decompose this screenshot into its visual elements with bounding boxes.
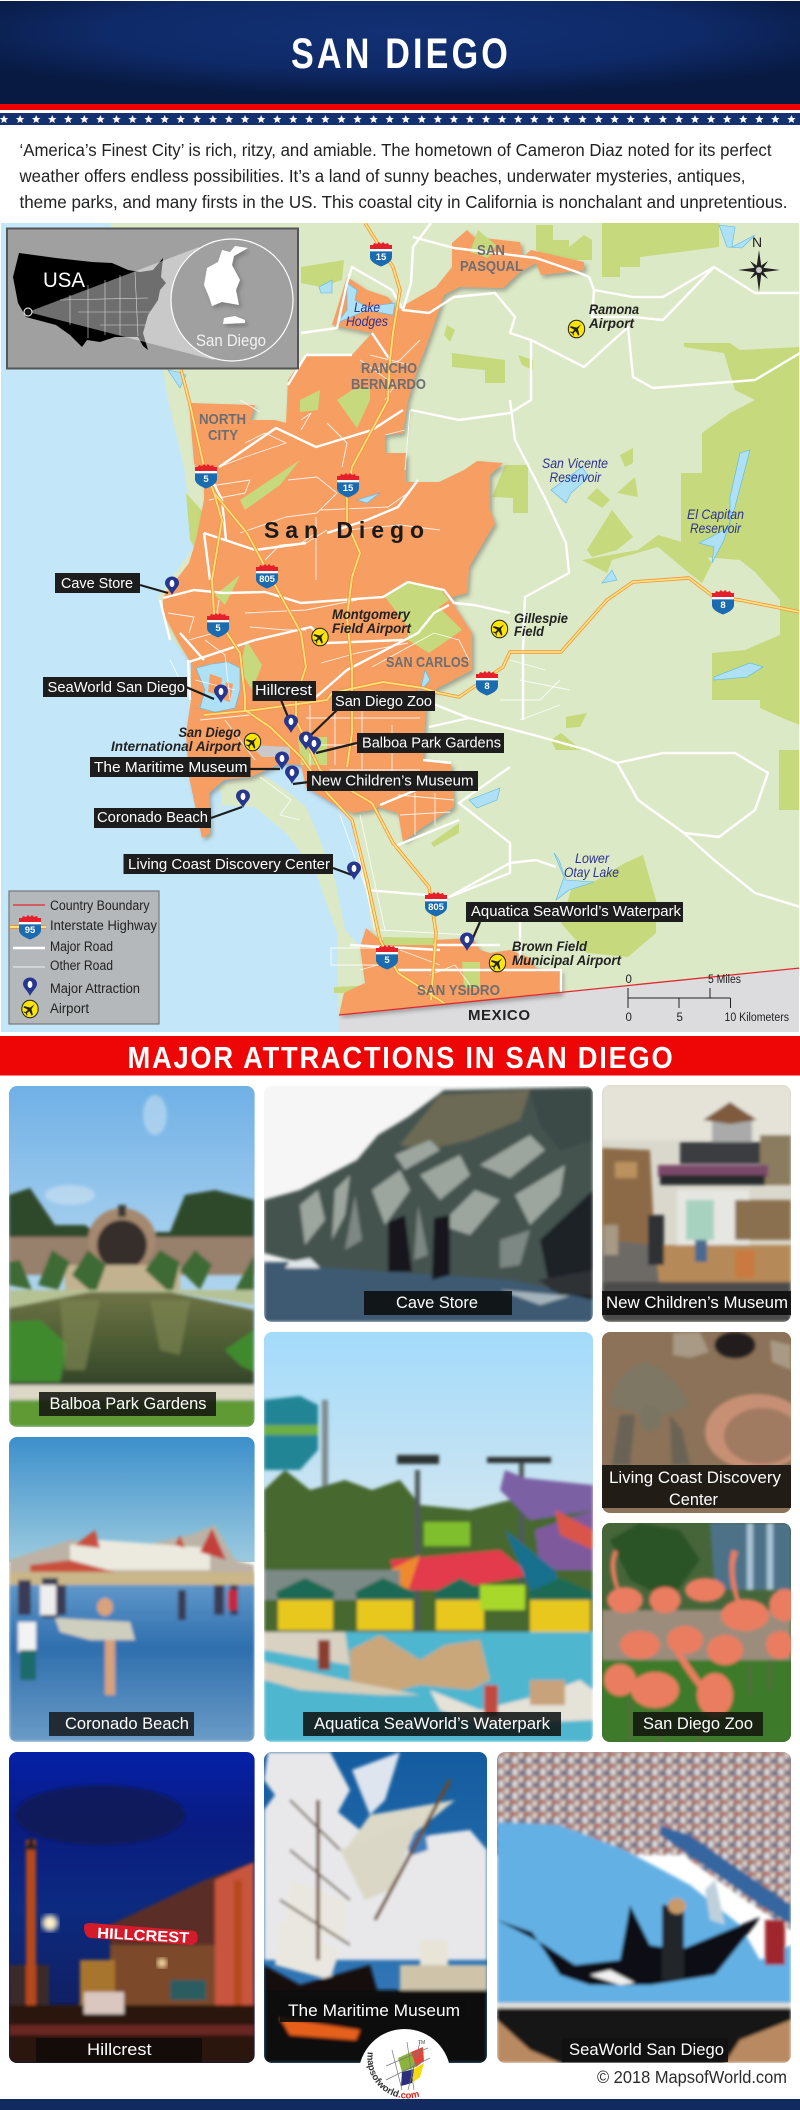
highway shields: 8 [720, 600, 726, 611]
caption: Living Coast Discovery Center [602, 1465, 791, 1509]
copyright: © 2018 MapsofWorld.com [597, 2067, 787, 2087]
region labels: SAN YSIDRO [417, 982, 500, 999]
country boundary [339, 968, 800, 1015]
highway shields: 805 [428, 902, 445, 913]
highway shields: 805 [259, 574, 276, 585]
lake labels: Hodges [346, 313, 388, 329]
airports [111, 301, 639, 972]
callout: Aquatica SeaWorld's Waterpark [460, 902, 683, 951]
lake labels: Reservoir [550, 469, 602, 485]
highway shields: 5 [215, 623, 221, 634]
caption: SeaWorld San Diego: SeaWorld San Diego [569, 2040, 724, 2059]
photo: The Maritime Museum [264, 1752, 487, 2063]
lake labels [346, 299, 744, 880]
callout: SeaWorld San Diego [43, 677, 228, 703]
airports: Gillespie [514, 610, 568, 626]
airports: San Diego [178, 724, 241, 740]
photo: Aquatica SeaWorld's Waterpark [264, 1332, 593, 1742]
lake labels: San Vicente [542, 455, 608, 471]
sign: Hillcrest: HILLCREST [97, 1925, 190, 1947]
interstate highways [181, 223, 800, 1003]
mission bay islands [208, 674, 233, 702]
logo: MapsofWorld [360, 2029, 449, 2098]
country label: Mexico: MEXICO [468, 1007, 530, 1024]
parks inside city [215, 230, 496, 988]
callout: New Children's Museum [285, 766, 478, 791]
legend [9, 891, 159, 1024]
legend: Country Boundary [50, 898, 150, 913]
callout: Cave Store: Cave Store [61, 576, 133, 592]
scale bar: 0 [626, 974, 632, 986]
airports: Ramona [589, 301, 639, 317]
highway shields: 15 [376, 252, 387, 263]
callout: SeaWorld San Diego: SeaWorld San Diego [48, 680, 185, 696]
region labels: BERNARDO [351, 376, 426, 393]
scale bar: 5 Miles [708, 974, 741, 986]
intro paragraph: weather offers endless possibilities. It’s a land of sunny beaches, underwater mysteries, antiques, [19, 166, 746, 186]
callout: The Maritime Museum [90, 752, 289, 777]
logo: MapsofWorld: TM [418, 2040, 425, 2046]
region labels: SAN CARLOS [386, 654, 469, 671]
caption: Cave Store: Cave Store [396, 1293, 478, 1312]
highway shields: 5 [203, 474, 209, 485]
compass: N [752, 234, 762, 250]
lake labels: Lower [575, 850, 610, 866]
caption: Coronado Beach: Coronado Beach [65, 1714, 189, 1733]
heading: major attractions [0, 1036, 800, 1076]
caption: Coronado Beach [49, 1712, 194, 1736]
airports: Brown Field [512, 938, 587, 954]
airports: International Airport [111, 738, 242, 754]
intro paragraph: theme parks, and many firsts in the US. This coastal city in California is nonchalant and unpretentious. [20, 192, 788, 212]
photo: Hillcrest [9, 1752, 255, 2063]
airports: Municipal Airport [512, 952, 622, 968]
callout: The Maritime Museum: The Maritime Museum [94, 760, 248, 776]
photo: San Diego Zoo [602, 1523, 800, 1742]
photo: Living Coast Discovery Center [602, 1332, 800, 1513]
other roads [168, 340, 570, 985]
zoom circle [171, 239, 293, 361]
airport runway [256, 746, 290, 757]
callout: Hillcrest [252, 681, 316, 733]
airports: Field [514, 623, 544, 639]
city of san diego area [163, 230, 584, 842]
highway shields: 8 [484, 681, 490, 692]
highway shields: 5 [384, 955, 390, 966]
caption: Balboa Park Gardens: Balboa Park Gardens [50, 1394, 206, 1413]
state lines [60, 272, 152, 338]
zoom wedge [28, 247, 214, 360]
attraction callouts and pins [43, 573, 683, 951]
photo: Balboa Park Gardens [9, 1086, 255, 1427]
lake labels: Lake [354, 299, 380, 315]
USA label: USA [43, 269, 85, 292]
caption: Cave Store [364, 1291, 512, 1315]
callout: Living Coast Discovery Center [124, 854, 361, 880]
lakes and reservoirs [168, 225, 763, 900]
scale bar [626, 974, 789, 1024]
callout: Hillcrest: Hillcrest [255, 683, 312, 699]
legend: Other Road [50, 958, 113, 973]
locator dot [24, 308, 32, 316]
airports: Field Airport [332, 620, 412, 636]
airports: Montgomery [332, 606, 411, 622]
callout: Balboa Park Gardens: Balboa Park Gardens [362, 736, 501, 752]
callout: Balboa Park Gardens [307, 733, 504, 755]
parks and open space [186, 223, 800, 993]
legend: Interstate Highway [50, 918, 157, 933]
title: SAN DIEGO [291, 30, 511, 78]
caption: Living Coast Discovery Center: Center [669, 1490, 718, 1509]
San Diego label: San Diego [196, 331, 266, 350]
san diego bay [209, 757, 372, 947]
legend: Major Attraction [50, 981, 140, 996]
lake labels: Reservoir [690, 520, 742, 536]
caption: Hillcrest [36, 2038, 202, 2062]
caption: San Diego Zoo [633, 1712, 763, 1736]
callout: San Diego Zoo: San Diego Zoo [335, 694, 432, 710]
panel: map of San Diego [1, 223, 800, 1032]
callout: Cave Store [55, 573, 179, 595]
callout: Coronado Beach: Coronado Beach [97, 810, 208, 826]
region labels: NORTH [199, 411, 246, 428]
region labels [199, 242, 523, 999]
scale bar: 5 [676, 1012, 683, 1024]
locator inset [7, 228, 298, 368]
intro paragraph [19, 140, 788, 212]
legend: Major Road [50, 939, 113, 954]
callout: Aquatica SeaWorld's Waterpark: Aquatica SeaWorld’s Waterpark [471, 904, 682, 920]
photo: SeaWorld San Diego [490, 1745, 800, 2063]
highway shields: 15 [343, 483, 354, 494]
ocean [1, 223, 339, 1032]
footer bar [0, 2099, 800, 2110]
San Diego silhouette [204, 246, 248, 324]
legend: 95 [25, 925, 36, 936]
callout: San Diego Zoo [299, 691, 435, 750]
region labels: PASQUAL [460, 258, 523, 275]
caption: Hillcrest: Hillcrest [87, 2040, 152, 2059]
highway shields [195, 242, 734, 970]
photo: Cave Store [264, 1086, 593, 1322]
scale bar: 0 [626, 1012, 632, 1024]
heading: major attractions: MAJOR ATTRACTIONS IN SAN DIEGO [128, 1040, 674, 1075]
compass [738, 234, 780, 292]
caption: Aquatica SeaWorld's Waterpark: Aquatica SeaWorld’s Waterpark [314, 1714, 550, 1733]
scale bar: 10 Kilometers [724, 1012, 789, 1024]
major roads [160, 223, 800, 993]
region labels: SAN [477, 242, 505, 259]
caption: New Children's Museum: New Children’s Museum [606, 1293, 788, 1312]
lake labels: El Capitan [687, 506, 744, 522]
airports: Airport [588, 315, 635, 331]
callout: Living Coast Discovery Center: Living Coast Discovery Center [128, 857, 330, 873]
city label: San Diego: San Diego [264, 517, 424, 543]
caption: Living Coast Discovery Center: Living Coast Discovery [609, 1468, 781, 1487]
USA silhouette [13, 253, 166, 350]
intro paragraph: ‘America’s Finest City’ is rich, ritzy, and amiable. The hometown of Cameron Diaz noted for its perfect [20, 140, 772, 160]
lake labels: Otay Lake [564, 864, 619, 880]
region labels: CITY [208, 427, 238, 444]
callout: Coronado Beach [94, 790, 250, 828]
photo: Coronado Beach [9, 1437, 255, 1742]
mexico [339, 968, 800, 1032]
caption: San Diego Zoo: San Diego Zoo [643, 1714, 753, 1733]
callout: New Children's Museum: New Children’s Museum [311, 774, 474, 790]
south bay urban area [339, 928, 561, 1015]
region labels: RANCHO [361, 360, 417, 377]
title banner [0, 1, 800, 104]
photo: New Children's Museum [602, 1085, 791, 1322]
logo: MapsofWorld: mapsofworld.com [366, 2052, 420, 2098]
caption: The Maritime Museum: The Maritime Museum [288, 2001, 460, 2020]
stars and stripes divider [0, 104, 800, 125]
legend: Airport [50, 1001, 89, 1016]
